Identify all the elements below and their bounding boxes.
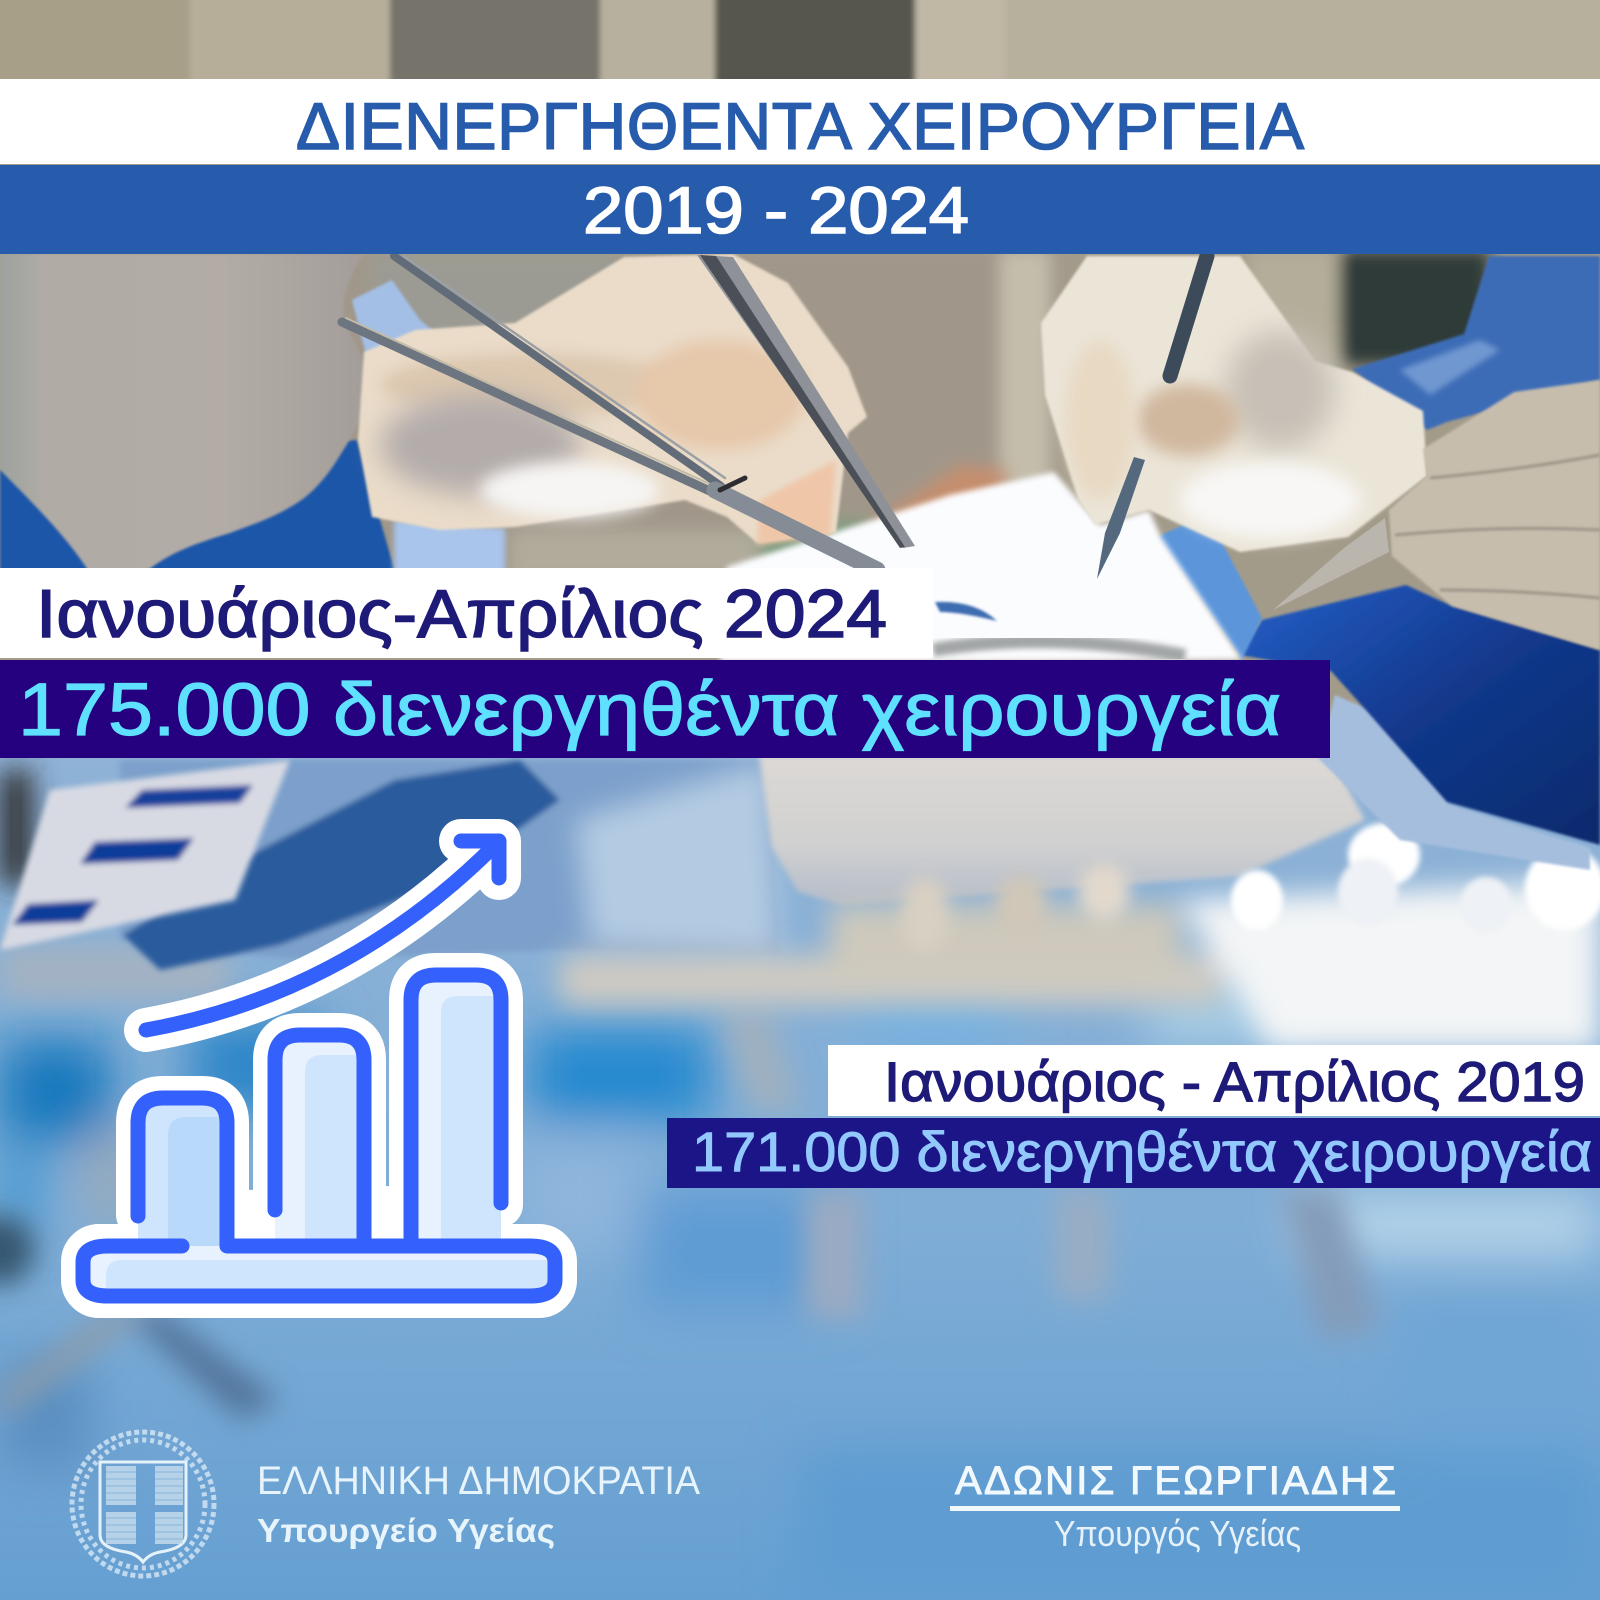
years banner <box>0 165 1600 254</box>
ministry name <box>257 1459 700 1549</box>
white patient drape <box>720 472 1242 662</box>
label: January - April 2019: Ιανουάριος - Απρίλιος 2019 <box>884 1050 1585 1113</box>
left surgeon sleeve <box>0 440 394 580</box>
white sticker outline <box>83 841 555 1296</box>
right glove <box>1041 256 1427 552</box>
shield stripes <box>106 1466 183 1544</box>
white folded cloth <box>759 755 1365 905</box>
icon: rising bar chart with arrow <box>83 841 555 1296</box>
label: January-April 2024: Ιανουάριος-Απρίλιος 2024 <box>36 576 887 652</box>
left blue cloth <box>120 760 780 970</box>
left grey glove <box>0 254 370 575</box>
middle glove <box>358 254 867 543</box>
far right glove <box>1389 380 1600 650</box>
room behind the surgeons <box>340 250 1490 580</box>
title banner <box>0 79 1600 164</box>
bokeh band and lights <box>560 880 1600 1050</box>
minister signature: ΑΔΩΝΙΣ ΓΕΩΡΓΙΑΔΗΣ <box>955 1459 1396 1503</box>
callout: 175.000 surgeries: 175.000 διενεργηθέντα χειρουργεία <box>18 668 1281 751</box>
ministry name: ΕΛΛΗΝΙΚΗ ΔΗΜΟΚΡΑΤΙΑ <box>257 1459 700 1503</box>
right sleeve <box>1352 256 1600 430</box>
emblem: coat of arms of Greece <box>72 1432 214 1576</box>
title heading: ΔΙΕΝΕΡΓΗΘΕΝΤΑ ΧΕΙΡΟΥΡΓΕΙΑ <box>296 89 1304 163</box>
wall and windows at top <box>0 0 1600 100</box>
light blue sheet fold <box>1157 514 1262 660</box>
striped cloth <box>0 760 290 950</box>
blue line art <box>83 841 555 1296</box>
laurel wreath <box>72 1432 214 1576</box>
minister signature <box>950 1459 1400 1554</box>
right blue drape <box>1240 585 1600 845</box>
right textured drape band <box>1318 695 1590 870</box>
shield <box>100 1462 186 1562</box>
minister signature: Υπουργός Υγείας <box>1054 1513 1301 1554</box>
bar fills <box>83 975 555 1296</box>
years text: 2019 - 2024 <box>583 173 969 247</box>
callout: 171.000 surgeries: 171.000 διενεργηθέντα χειρουργεία <box>692 1120 1592 1183</box>
ministry name: Υπουργείο Υγείας <box>257 1512 555 1549</box>
lower blurred region <box>0 755 1600 1600</box>
surgical instruments <box>342 256 1207 570</box>
